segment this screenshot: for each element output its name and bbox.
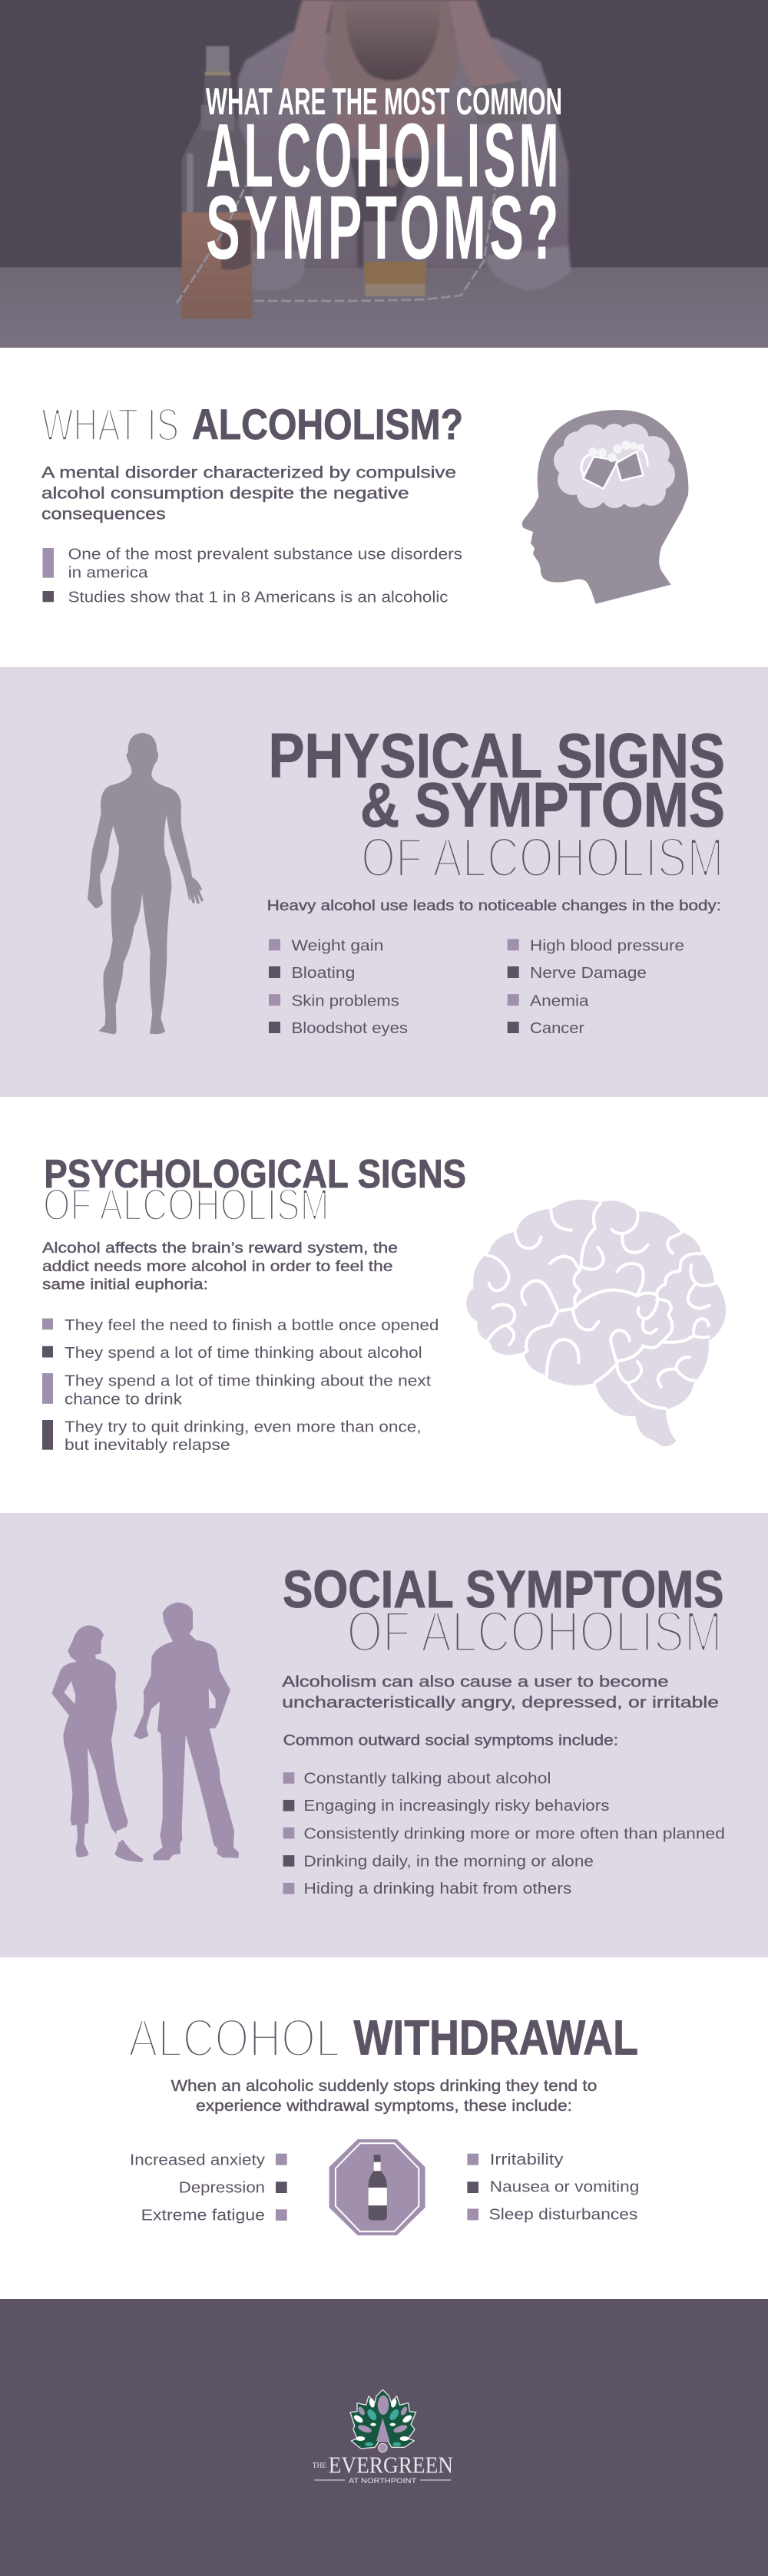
list item: talking about alcohol: Constantly talking about alcohol	[303, 1769, 551, 1787]
list item: nausea or vomiting: Nausea or vomiting	[490, 2178, 639, 2196]
text block: mood changes: uncharacteristically angry, depressed, or irritable	[282, 1693, 719, 1712]
icon: stop sign with bottle	[329, 2139, 425, 2235]
text block: reward system: Alcohol affects the brain’s reward system, the	[42, 1240, 398, 1257]
heading: psychological signs: OF ALCOHOLISM	[43, 1180, 329, 1230]
heading: alcohol withdrawal: WITHDRAWAL	[353, 2010, 638, 2066]
photo: person slumped over table with bottle and glass	[0, 0, 768, 348]
heading: physical signs and symptoms	[269, 722, 725, 889]
list: physical symptoms column 1	[269, 936, 408, 1037]
list: withdrawal symptoms left	[130, 2152, 287, 2224]
icon: human body silhouette	[88, 733, 204, 1035]
heading: alcohol withdrawal: ALCOHOL	[128, 2008, 340, 2068]
heading: psychological signs: PSYCHOLOGICAL SIGNS	[44, 1151, 466, 1196]
wordmark: THE	[313, 2461, 326, 2470]
bullet: next chance to drink: chance to drink	[65, 1391, 183, 1408]
heading: psychological signs	[43, 1151, 466, 1230]
bottle	[182, 46, 252, 319]
heading: what is alcoholism: WHAT IS	[41, 398, 179, 451]
list item: skin problems: Skin problems	[292, 992, 399, 1009]
panel: hero header	[0, 0, 768, 348]
bullet: try to quit	[42, 1419, 421, 1454]
bullet: try to quit: They try to quit drinking, even more than once,	[65, 1419, 421, 1436]
text block: definition: A mental disorder characterized by compulsive	[41, 464, 456, 482]
bullet: next chance to drink	[42, 1372, 432, 1408]
text block: reward system: same initial euphoria:	[42, 1276, 208, 1293]
list: physical symptoms column 2	[508, 936, 684, 1037]
text block: reward system: addict needs more alcohol in order to feel the	[42, 1258, 393, 1275]
bullet: most prevalent	[43, 547, 462, 582]
list item: cancer: Cancer	[530, 1019, 584, 1037]
list: social symptoms	[283, 1769, 725, 1897]
icon: brain	[466, 1200, 726, 1446]
list item: nerve damage: Nerve Damage	[530, 964, 647, 982]
bullet: 1 in 8: Studies show that 1 in 8 Americans is an alcoholic	[68, 589, 448, 606]
list: withdrawal symptoms right	[467, 2151, 639, 2224]
bullet: finish a bottle: They feel the need to finish a bottle once opened	[65, 1317, 439, 1334]
list item: risky behaviors: Engaging in increasingly risky behaviors	[303, 1797, 609, 1815]
bullet: thinking about alcohol: They spend a lot of time thinking about alcohol	[65, 1345, 422, 1362]
text block: mood changes: Alcoholism can also cause a user to become	[282, 1673, 668, 1690]
list item: high blood pressure: High blood pressure	[530, 936, 684, 955]
list item: drinking more than planned: Consistently drinking more or more often than planned	[303, 1825, 725, 1842]
panel: what is alcoholism	[0, 348, 768, 667]
text block: reward system	[42, 1240, 398, 1293]
list item: bloating: Bloating	[292, 964, 355, 982]
panel: physical signs	[0, 667, 768, 1097]
list item: increased anxiety: Increased anxiety	[130, 2152, 266, 2169]
icon: woman and man silhouettes	[51, 1602, 239, 1862]
text block: withdrawal intro: experience withdrawal symptoms, these include:	[196, 2097, 572, 2115]
bullet: next chance to drink: They spend a lot of time thinking about the next	[65, 1372, 432, 1389]
list item: hiding a habit: Hiding a drinking habit from others	[303, 1880, 571, 1897]
wordmark: EVERGREEN	[329, 2452, 453, 2479]
list item: sleep disturbances: Sleep disturbances	[488, 2206, 637, 2224]
text block: intro: Heavy alcohol use leads to noticeable changes in the body:	[267, 897, 721, 914]
text block: definition: consequences	[41, 506, 166, 523]
icon: peacock of leaves	[350, 2389, 416, 2452]
list item: depression: Depression	[179, 2179, 265, 2197]
wordmark: AT NORTHPOINT	[349, 2477, 417, 2485]
wordmark	[313, 2452, 453, 2485]
heading: what is alcoholism: ALCOHOLISM?	[192, 401, 463, 448]
list item: bloodshot eyes: Bloodshot eyes	[292, 1019, 408, 1037]
heading: alcohol withdrawal	[128, 2008, 638, 2068]
list item: weight gain: Weight gain	[292, 936, 383, 955]
panel: footer	[0, 2299, 768, 2576]
text block: list intro: Common outward social symptoms include:	[283, 1732, 618, 1749]
title	[206, 81, 562, 278]
icon: head with beer mugs in brain	[522, 410, 688, 604]
bullet: try to quit: but inevitably relapse	[65, 1437, 230, 1454]
list item: drinking daily: Drinking daily, in the morning or alone	[303, 1852, 594, 1870]
bullet: most prevalent: in america	[68, 565, 149, 582]
list item: irritability	[467, 2151, 564, 2168]
heading: physical signs and symptoms: & SYMPTOMS	[360, 770, 725, 840]
list item: cancer	[508, 1019, 584, 1037]
heading: what is alcoholism	[41, 398, 463, 451]
panel: alcohol withdrawal	[0, 1957, 768, 2299]
text block: definition	[41, 464, 456, 523]
list item: bloating	[269, 964, 355, 982]
panel: social symptoms	[0, 1513, 768, 1957]
glass	[363, 221, 426, 296]
text block: mood changes	[282, 1673, 719, 1712]
panel: psychological signs	[0, 1097, 768, 1513]
chain	[177, 186, 495, 303]
list item: extreme fatigue: Extreme fatigue	[141, 2207, 265, 2224]
logo: The Evergreen at Northpoint	[313, 2389, 453, 2485]
text block: withdrawal intro: When an alcoholic suddenly stops drinking they tend to	[171, 2077, 597, 2095]
list item: anemia	[508, 992, 589, 1009]
text block: definition: alcohol consumption despite the negative	[41, 484, 409, 502]
text block: withdrawal intro	[171, 2077, 597, 2115]
heading: social symptoms	[283, 1560, 724, 1664]
bullet: most prevalent: One of the most prevalent substance use disorders	[68, 547, 462, 563]
list item: anemia: Anemia	[530, 992, 589, 1009]
list item: irritability: Irritability	[490, 2151, 564, 2168]
